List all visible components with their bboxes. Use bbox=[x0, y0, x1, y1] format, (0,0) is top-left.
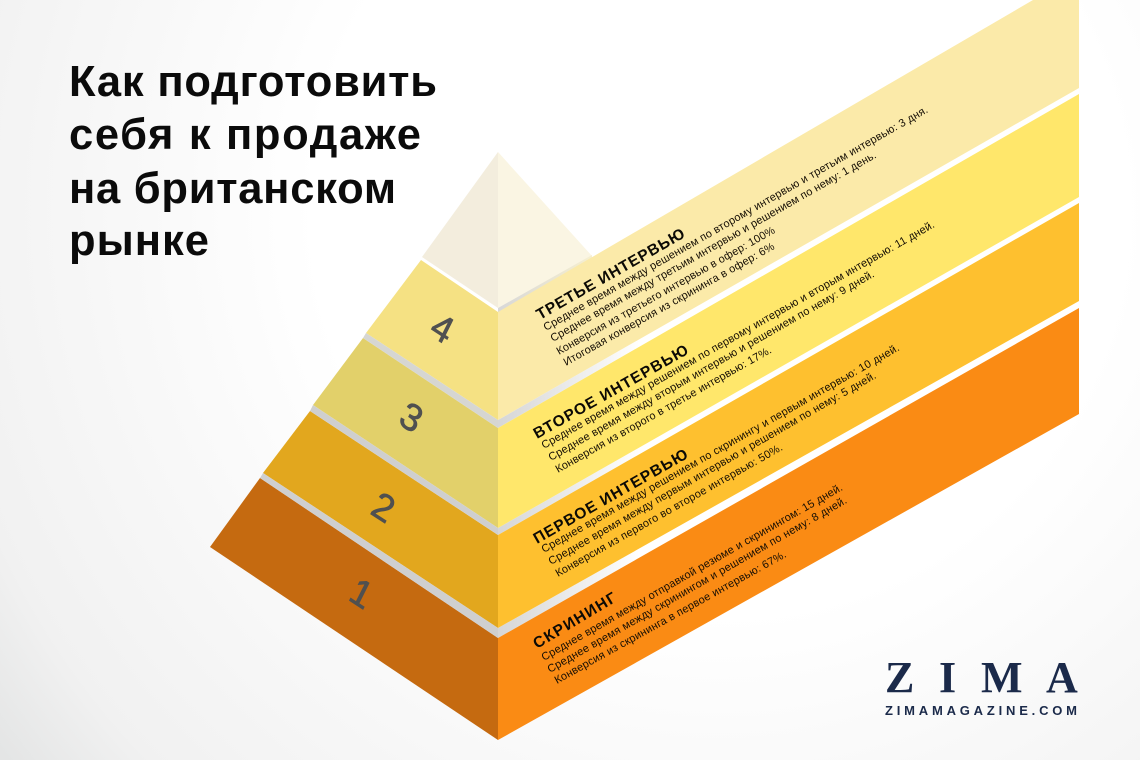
text: second interview details: Конверсия из второго в третье интервью: 17%. bbox=[554, 344, 774, 476]
tier 3 left face bbox=[313, 338, 498, 528]
heading: second interview: ВТОРОЕ ИНТЕРВЬЮ bbox=[531, 342, 691, 442]
number 1: 1 bbox=[343, 569, 380, 617]
text: second interview details: Среднее время между вторым интервью и решением по нему: 9 дней. bbox=[547, 268, 876, 464]
tier 1 left face bbox=[210, 478, 498, 740]
logo url: ZIMAMAGAZINE.COM bbox=[885, 703, 1077, 718]
band: third interview bbox=[498, 0, 1079, 420]
heading: screening: СКРИНИНГ bbox=[530, 589, 620, 652]
text: first interview details: Среднее время между первым интервью и решением по нему: 5 дней. bbox=[547, 370, 878, 568]
text: third interview details: Среднее время между третьим интервью и решением по нему: 1 день. bbox=[549, 149, 878, 345]
title: Как подготовить bbox=[69, 58, 437, 106]
pyramid cap left bbox=[422, 152, 498, 308]
text: second interview details: Среднее время между решением по первому интервью и вторым интервью: 11 дней. bbox=[540, 219, 937, 452]
text: third interview details: Итоговая конверсия из скрининга в офер: 6% bbox=[562, 241, 777, 369]
heading: first interview: ПЕРВОЕ ИНТЕРВЬЮ bbox=[531, 446, 691, 547]
text: first interview details: Конверсия из первого во второе интервью: 50%. bbox=[554, 442, 785, 580]
tier 4 left face bbox=[366, 260, 498, 420]
number 2: 2 bbox=[365, 483, 402, 531]
pyramid cap right bbox=[498, 152, 592, 308]
text: screening details: Конверсия из скрининга в первое интервью: 67%. bbox=[553, 549, 788, 687]
text: first interview details: Среднее время между решением по скринингу и первым интервью: 10 дней. bbox=[540, 342, 902, 556]
band: first interview bbox=[498, 203, 1079, 628]
logo bbox=[885, 653, 1078, 718]
tier 2 left face bbox=[263, 411, 498, 628]
logo wordmark: ZIMA bbox=[885, 653, 1078, 702]
text: third interview details: Конверсия из третьего интервью в офер: 100% bbox=[555, 224, 777, 358]
title bbox=[69, 58, 437, 265]
text: third interview details: Среднее время между решением по второму интервью и третьим интервью: 3 дня. bbox=[542, 104, 930, 334]
band gaps bbox=[498, 88, 1079, 638]
title: себя к продаже bbox=[69, 111, 421, 159]
number 4: 4 bbox=[424, 304, 461, 352]
title: на британском bbox=[69, 165, 396, 213]
number 3: 3 bbox=[393, 393, 430, 441]
heading: third interview: ТРЕТЬЕ ИНТЕРВЬЮ bbox=[534, 225, 688, 323]
title: рынке bbox=[69, 217, 209, 265]
pyramid left face bbox=[210, 152, 498, 740]
tier numbers bbox=[343, 304, 461, 617]
text: screening details: Среднее время между отправкой резюме и скринингом: 15 дней. bbox=[540, 482, 845, 664]
band: screening bbox=[498, 308, 1079, 740]
text: screening details: Среднее время между скринингом и решением по нему: 8 дней. bbox=[546, 495, 849, 676]
band: second interview bbox=[498, 94, 1079, 528]
